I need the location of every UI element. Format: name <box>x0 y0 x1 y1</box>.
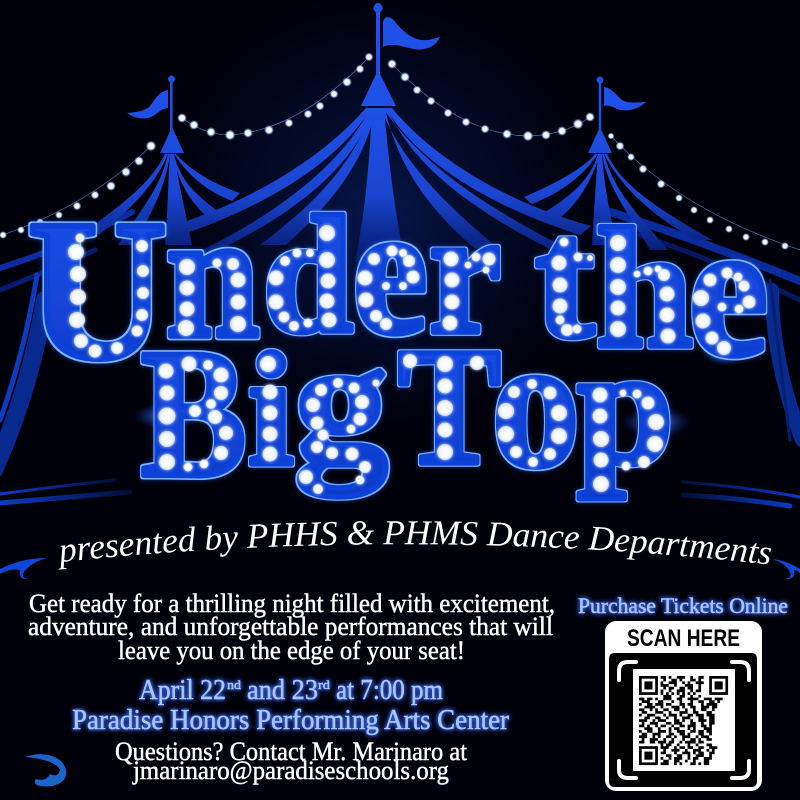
letter d: d <box>263 181 353 368</box>
description text: adventure, and unforgettable performances that will <box>28 612 553 641</box>
swoosh: right ornament <box>772 559 800 579</box>
contact text: Questions? Contact Mr. Marinaro at <box>115 737 468 766</box>
scan here label: SCAN HERE <box>627 625 740 652</box>
description text <box>28 589 555 665</box>
letter t: t <box>535 183 594 373</box>
letter h: h <box>596 194 693 384</box>
event date and time: nd <box>227 677 242 692</box>
event date and time: and 23 <box>247 675 318 706</box>
letter n: n <box>166 176 259 375</box>
event date and time: rd <box>318 677 331 692</box>
letter i: i <box>248 320 294 500</box>
letter r: r <box>429 173 501 371</box>
letter B: B <box>141 312 246 516</box>
light flares <box>133 338 746 438</box>
contact text: jmarinaro@paradiseschools.org <box>132 756 449 785</box>
event date and time <box>139 675 443 706</box>
letter p: p <box>577 314 674 499</box>
left tent <box>85 76 240 245</box>
centre tent <box>165 3 591 262</box>
circus tent illustration <box>0 3 800 506</box>
letter T: T <box>398 313 501 499</box>
corner brackets <box>619 662 749 778</box>
inner dark panel <box>609 653 757 787</box>
subtitle curve and text: presented by PHHS & PHMS Dance Departments <box>58 521 772 570</box>
event date and time: April 22 <box>139 675 226 706</box>
letter o: o <box>492 301 579 505</box>
swoosh: left ornament <box>0 558 47 579</box>
right tent <box>524 76 712 250</box>
icon: school logo <box>25 754 66 786</box>
letter U: U <box>28 179 167 401</box>
background glow <box>100 0 660 480</box>
string lights <box>0 52 800 250</box>
title: Under the Big Top <box>28 169 768 516</box>
description text: Get ready for a thrilling night filled with excitement, <box>29 589 555 618</box>
letter g: g <box>295 306 388 497</box>
event date and time: at 7:00 pm <box>336 675 443 706</box>
event venue: Paradise Honors Performing Arts Center <box>72 705 510 736</box>
outer canopy bands and side drapes <box>0 208 800 506</box>
letter e: e <box>689 184 768 397</box>
QR code <box>633 669 735 771</box>
description text: leave you on the edge of your seat! <box>118 636 465 665</box>
panel frame <box>605 621 762 791</box>
QR code panel <box>605 621 762 791</box>
purchase tickets heading: Purchase Tickets Online <box>578 593 788 618</box>
letter e: e <box>353 169 428 373</box>
contact text <box>115 737 468 785</box>
